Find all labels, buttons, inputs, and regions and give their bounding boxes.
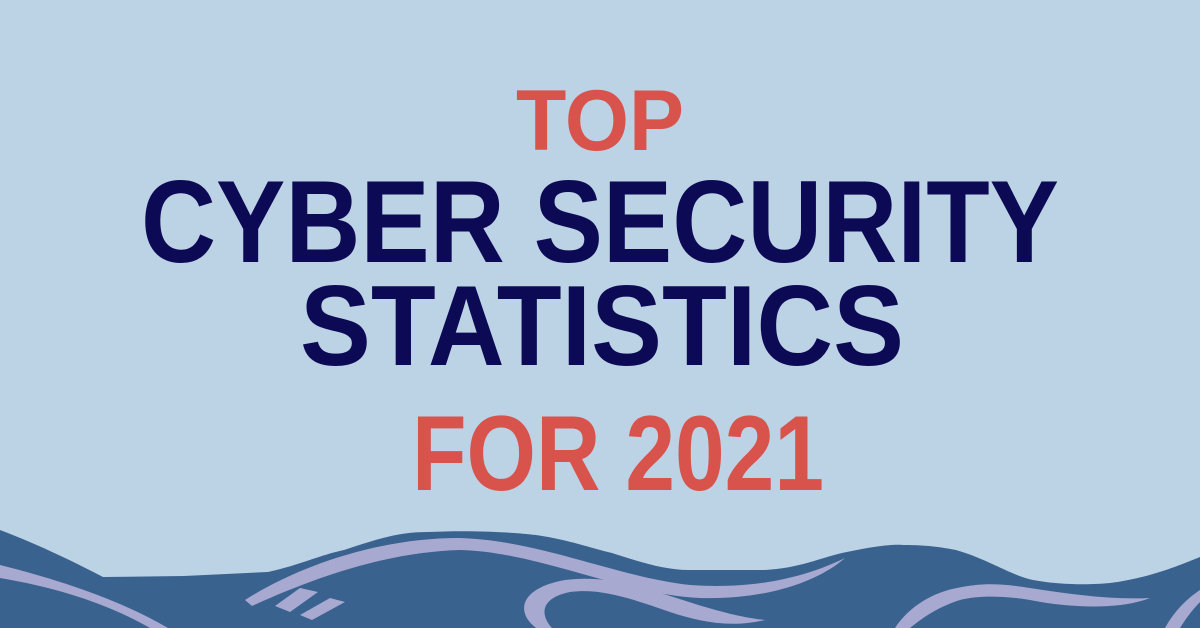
title: FOR 2021: FOR 2021 (412, 393, 824, 513)
title: CYBER SECURITY: CYBER SECURITY (141, 156, 1059, 287)
title: STATISTICS: STATISTICS (300, 263, 904, 390)
wave swooshes (0, 565, 168, 628)
title: TOP: TOP (516, 73, 684, 169)
decorative wave band (0, 530, 1200, 628)
